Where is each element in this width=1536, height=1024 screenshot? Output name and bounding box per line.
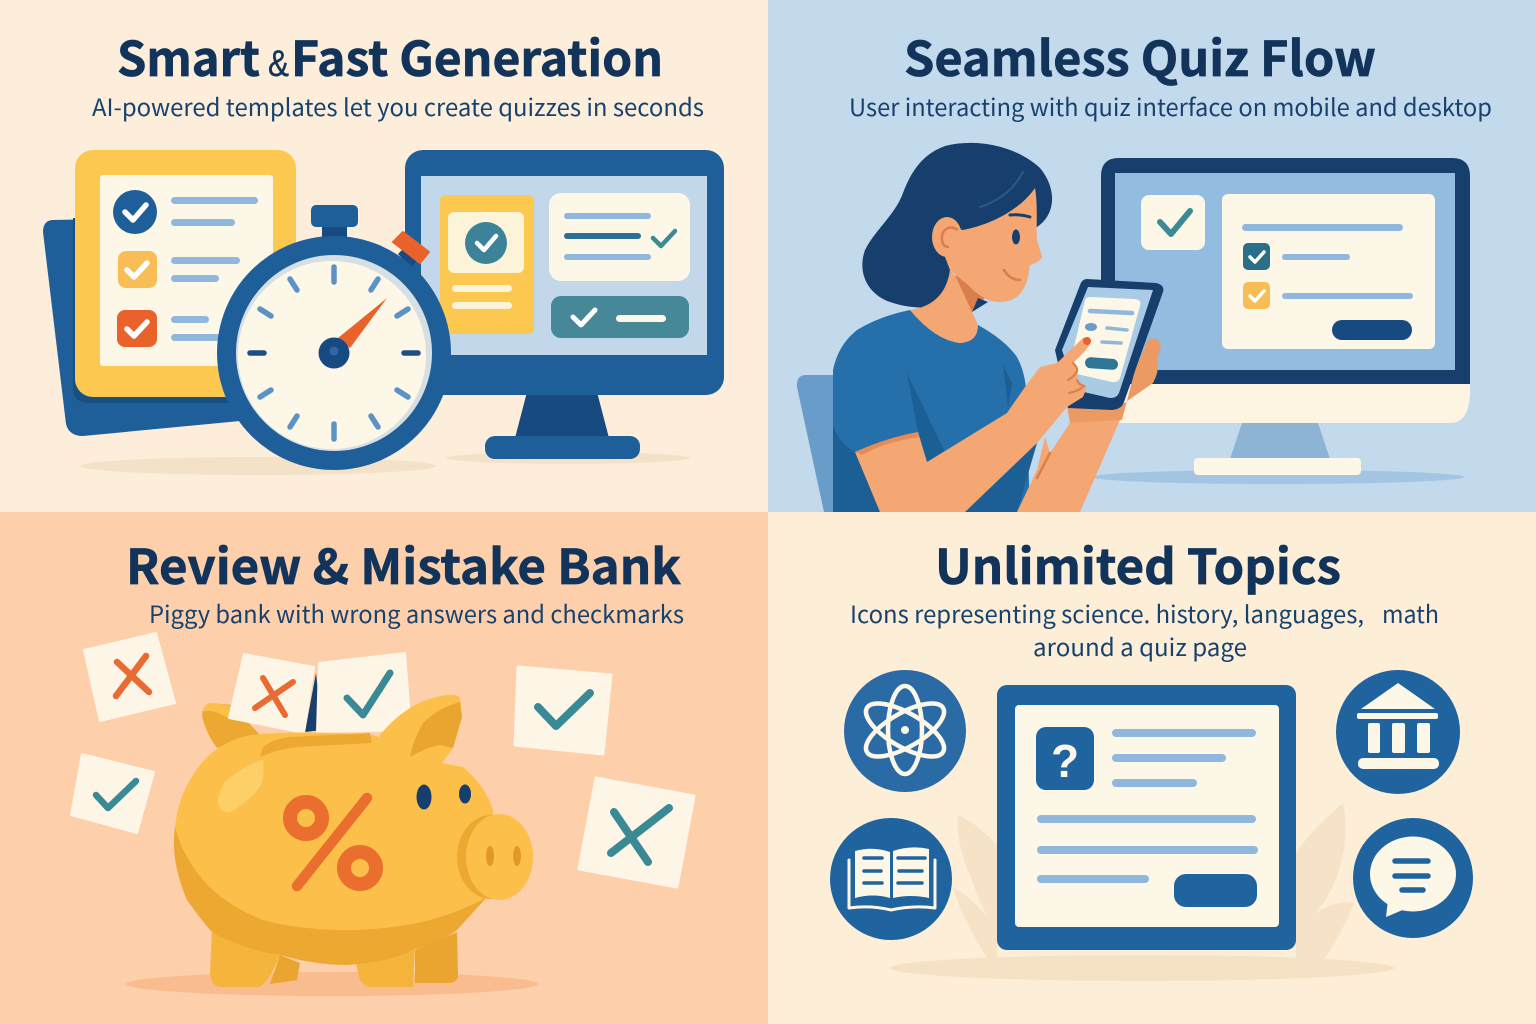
subheading: icons representing topics: around a quiz page: [1033, 628, 1247, 663]
heading: unlimited topics: Unlimited Topics: [935, 528, 1341, 598]
subheading: icons representing topics: math: [1382, 595, 1439, 630]
icon: background leaves: [890, 803, 1394, 981]
heading: smart and fast: &: [268, 43, 289, 84]
heading: smart and fast: Smart: [117, 20, 260, 90]
subheading: templates: AI-powered templates let you create quizzes in seconds: [92, 88, 704, 123]
icon: math speech bubble: [1353, 818, 1473, 938]
heading: smart and fast: [117, 20, 663, 90]
icon: quiz page: [997, 685, 1296, 950]
icon: person using phone: [797, 143, 1163, 512]
percent symbol: [290, 798, 376, 886]
icon: desktop monitor: [405, 150, 724, 464]
panel: review and mistake bank: [0, 512, 768, 1024]
icon: languages book: [830, 818, 952, 940]
icon: desktop with quiz interface: [1092, 158, 1470, 484]
icon: history building: [1336, 670, 1460, 794]
icon: stopwatch: [80, 205, 451, 475]
icon: quiz card stack: [43, 150, 296, 436]
panel: smart and fast generation: [0, 0, 768, 512]
icon: floating answer cards: [71, 633, 694, 887]
icon: piggy bank with cards: [126, 653, 538, 996]
heading: seamless quiz flow: Seamless Quiz Flow: [904, 20, 1376, 90]
panel: seamless quiz flow: [768, 0, 1536, 512]
subheading: icons representing topics: Icons representing science. history, languages,: [850, 595, 1364, 630]
subheading: icons representing topics: [850, 595, 1439, 663]
subheading: piggy bank: Piggy bank with wrong answers and checkmarks: [149, 595, 684, 630]
heading: review and mistake bank: Review & Mistake Bank: [126, 528, 681, 598]
icon: science atom: [844, 670, 966, 792]
panel: unlimited topics: [768, 512, 1536, 1024]
heading: smart and fast: Fast Generation: [291, 20, 663, 90]
icon: quiz page: ?: [1051, 735, 1079, 787]
subheading: user interacting: User interacting with quiz interface on mobile and desktop: [849, 88, 1492, 123]
